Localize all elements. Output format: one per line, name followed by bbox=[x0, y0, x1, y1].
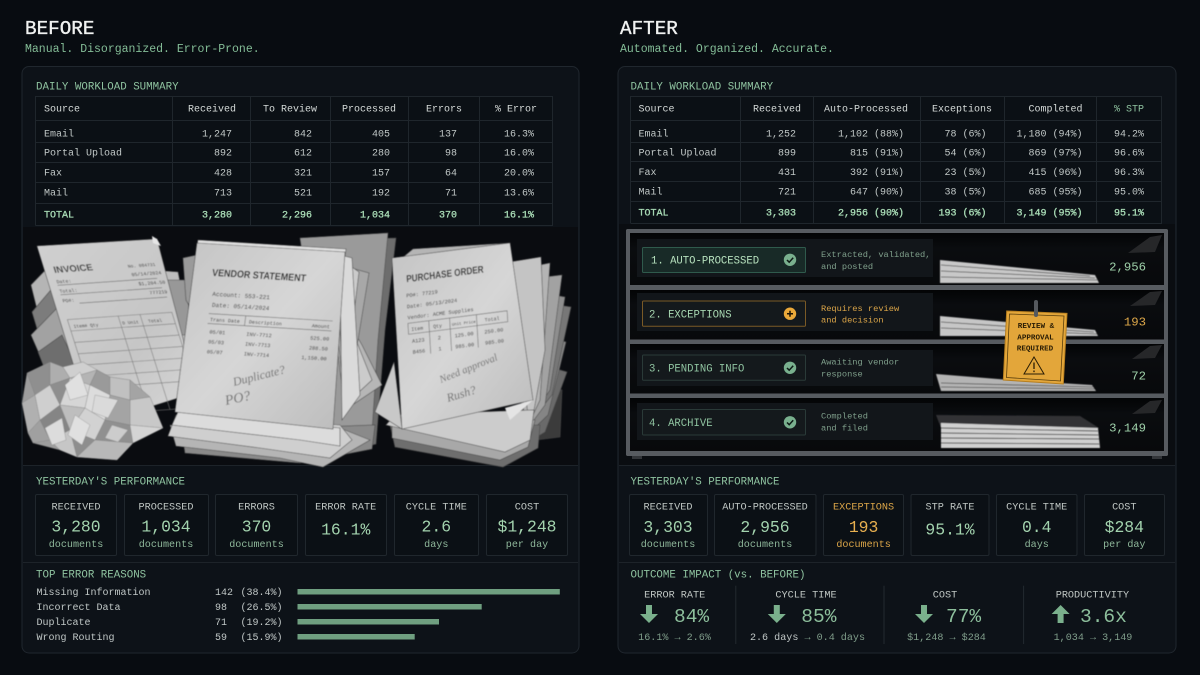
impact: cycle time: CYCLE TIME bbox=[775, 591, 837, 602]
shelf row 1: auto-processed: Extracted, validated, bbox=[821, 250, 930, 260]
kpi: cycle time bbox=[394, 494, 478, 556]
kpi: processed bbox=[124, 494, 208, 556]
kpi: processed: PROCESSED bbox=[138, 502, 194, 514]
bar chart: error reasons: (19.2%) bbox=[240, 617, 283, 629]
section label: outcome impact: OUTCOME IMPACT (vs. BEFORE) bbox=[630, 570, 805, 582]
kpi: received bbox=[630, 494, 708, 556]
purchase order stack: Unit Price bbox=[452, 320, 476, 328]
vendor statement stack: Amount bbox=[311, 323, 330, 330]
table: before workload: 192 bbox=[372, 188, 390, 200]
table: before workload: 428 bbox=[214, 168, 232, 180]
bar chart: error reasons: (26.5%) bbox=[240, 602, 283, 614]
table: after workload bbox=[630, 96, 1162, 224]
table: before workload: 16.0% bbox=[504, 148, 534, 160]
table: before workload: 612 bbox=[294, 148, 312, 160]
illustration: paper piles bbox=[22, 227, 578, 467]
kpi: error rate: ERROR RATE bbox=[315, 502, 376, 514]
before heading: BEFORE bbox=[25, 18, 94, 40]
invoice stack bbox=[31, 236, 205, 425]
impact: productivity: 1,034 → 3,149 bbox=[1054, 633, 1132, 644]
vendor statement stack: INV-7712 bbox=[246, 332, 272, 339]
table: after workload: 38 (5%) bbox=[944, 186, 986, 198]
bar chart: error reasons: 59 bbox=[215, 633, 227, 644]
table: after workload: Mail bbox=[638, 186, 663, 198]
impact: cost: $1,248 → $284 bbox=[907, 632, 986, 644]
table: after workload: Completed bbox=[1028, 104, 1083, 116]
stack: pending papers bbox=[936, 374, 1096, 391]
shelf row 3: pending info: 72 bbox=[1131, 370, 1146, 384]
shelf row 3: pending info: 3. PENDING INFO bbox=[649, 364, 744, 376]
stack: auto-processed papers bbox=[940, 260, 1099, 283]
vendor statement stack: Trans Date bbox=[210, 317, 240, 325]
table: after workload: 392 (91%) bbox=[850, 167, 904, 179]
table: after workload: 815 (91%) bbox=[850, 148, 904, 160]
table: after workload: 431 bbox=[778, 168, 796, 179]
table: after workload: 3,303 bbox=[766, 208, 796, 220]
table: after workload: Received bbox=[753, 104, 801, 116]
kpi: cost bbox=[1084, 494, 1164, 556]
table: before workload: 1,034 bbox=[360, 210, 390, 222]
table: before workload: 137 bbox=[439, 130, 457, 140]
illustration: sorted shelf bbox=[619, 224, 1175, 466]
table: before workload: 1,247 bbox=[202, 130, 232, 140]
purchase order stack: PO#: 77219 bbox=[406, 289, 438, 299]
shelf row 3: pending info bbox=[642, 355, 1146, 384]
kpi: received: 3,303 bbox=[643, 518, 693, 537]
table: after workload: Email bbox=[638, 128, 669, 140]
purchase order stack bbox=[375, 243, 571, 467]
vendor statement stack: INV-7714 bbox=[243, 352, 269, 359]
impact: cycle time bbox=[750, 591, 865, 644]
purchase order stack: Need approval bbox=[437, 352, 499, 386]
table: before workload: 842 bbox=[294, 130, 312, 140]
table: after workload: 96.6% bbox=[1114, 148, 1144, 160]
shelf row 2: exceptions: 193 bbox=[1124, 316, 1146, 330]
purchase order stack: 125.00 bbox=[455, 331, 474, 340]
kpi: errors: ERRORS bbox=[238, 502, 275, 514]
impact: productivity bbox=[1052, 591, 1132, 644]
table: after workload: TOTAL bbox=[638, 208, 669, 220]
crumpled paper ball bbox=[22, 362, 163, 460]
shelf row 3: pending info: Awaiting vendor bbox=[821, 358, 899, 368]
section label: after performance: YESTERDAY'S PERFORMANCE bbox=[630, 476, 780, 488]
table: before workload: 13.6% bbox=[504, 188, 534, 200]
kpi: exceptions bbox=[824, 494, 904, 556]
kpi: cycle time: CYCLE TIME bbox=[406, 502, 467, 514]
kpi: cost: $284 bbox=[1105, 518, 1144, 537]
impact: error rate: 16.1% → 2.6% bbox=[638, 633, 712, 644]
kpi: cost: per day bbox=[1103, 539, 1146, 551]
impact: error rate bbox=[638, 591, 712, 644]
impact: cost: 77% bbox=[946, 606, 981, 628]
table: after workload: 721 bbox=[778, 188, 796, 198]
purchase order stack: 250.00 bbox=[484, 327, 504, 336]
invoice stack: INVOICE bbox=[52, 263, 94, 276]
vendor statement stack: Account: 553-221 bbox=[212, 291, 271, 301]
table: before workload: Portal Upload bbox=[44, 148, 122, 160]
table: before workload: 370 bbox=[439, 210, 457, 222]
bar chart: error reasons: 71 bbox=[215, 618, 227, 629]
table: before workload: 16.1% bbox=[504, 210, 534, 222]
shelf row 2: exceptions: and decision bbox=[821, 316, 884, 326]
table: after workload: 193 (6%) bbox=[938, 208, 986, 220]
table: after workload: 95.0% bbox=[1114, 188, 1144, 198]
table: before workload: To Review bbox=[263, 104, 317, 116]
impact: error rate: ERROR RATE bbox=[644, 591, 705, 602]
kpi: stp rate bbox=[911, 494, 989, 556]
section label: before performance: YESTERDAY'S PERFORMANCE bbox=[36, 476, 185, 488]
table: before workload: Mail bbox=[44, 188, 68, 200]
vendor statement stack: 1,150.00 bbox=[301, 355, 327, 363]
bar chart: error reasons: Wrong Routing bbox=[36, 632, 115, 644]
table: before workload: 71 bbox=[445, 188, 457, 200]
invoice stack: $1,204.50 bbox=[138, 280, 166, 287]
kpi: exceptions: EXCEPTIONS bbox=[833, 502, 894, 514]
shelf row 2: exceptions: 2. EXCEPTIONS bbox=[649, 310, 732, 322]
kpi: auto-processed bbox=[714, 494, 816, 556]
vendor statement stack: VENDOR STATEMENT bbox=[211, 268, 307, 284]
invoice stack: Date: bbox=[56, 279, 72, 285]
kpi: received: RECEIVED bbox=[52, 502, 100, 514]
callout: review tag: APPROVAL bbox=[1017, 334, 1054, 342]
purchase order stack: PURCHASE ORDER bbox=[406, 264, 484, 285]
bar chart: error reasons: Duplicate bbox=[36, 617, 91, 629]
vendor statement stack: 05/03 bbox=[208, 339, 224, 346]
impact: productivity: PRODUCTIVITY bbox=[1056, 591, 1129, 602]
purchase order stack: Total bbox=[485, 316, 500, 324]
shelf row 4: archive: 3,149 bbox=[1109, 422, 1146, 436]
bar chart: error reasons: (38.4%) bbox=[240, 587, 283, 599]
table: before workload: 157 bbox=[372, 168, 390, 180]
callout: review tag bbox=[1003, 300, 1067, 384]
table: before workload: 3,280 bbox=[202, 210, 232, 222]
invoice stack: D Unit bbox=[122, 319, 140, 326]
before column bbox=[22, 18, 579, 653]
kpi: auto-processed: documents bbox=[738, 539, 792, 551]
table: after workload: 869 (97%) bbox=[1028, 148, 1082, 160]
kpi: cost: per day bbox=[506, 539, 548, 551]
section label: before workload: DAILY WORKLOAD SUMMARY bbox=[36, 82, 179, 94]
shelf row 4: archive: and filed bbox=[821, 423, 868, 433]
table: before workload: Email bbox=[44, 128, 74, 140]
purchase order stack: Rush? bbox=[444, 383, 478, 405]
kpi: cycle time: days bbox=[1025, 539, 1049, 551]
table: before workload: Fax bbox=[44, 168, 62, 180]
shelf row 4: archive bbox=[642, 410, 1146, 436]
invoice stack: Total: bbox=[59, 288, 78, 295]
table: before workload: TOTAL bbox=[44, 210, 74, 222]
kpi: cycle time: days bbox=[424, 539, 448, 551]
invoice stack: 777219 bbox=[149, 289, 168, 296]
kpi: processed: 1,034 bbox=[141, 518, 191, 536]
impact: productivity: 3.6x bbox=[1080, 606, 1127, 628]
panel: before bbox=[22, 66, 579, 653]
stack: archive papers bbox=[936, 415, 1100, 448]
shelf row 3: pending info: response bbox=[821, 369, 863, 379]
table: before workload: 20.0% bbox=[504, 168, 534, 180]
table: after workload: 3,149 (95%) bbox=[1016, 208, 1082, 220]
kpi: cycle time: CYCLE TIME bbox=[1006, 502, 1067, 514]
kpi: cost: $1,248 bbox=[497, 518, 557, 536]
kpi: cycle time: 2.6 bbox=[422, 518, 451, 536]
kpi: auto-processed: AUTO-PROCESSED bbox=[722, 502, 808, 514]
kpi: exceptions: documents bbox=[836, 539, 891, 551]
kpi: received: RECEIVED bbox=[644, 502, 692, 514]
section label: after workload: DAILY WORKLOAD SUMMARY bbox=[630, 82, 774, 94]
table: before workload: Errors bbox=[426, 104, 462, 116]
table: before workload bbox=[36, 96, 553, 226]
vendor statement stack: 05/01 bbox=[209, 330, 226, 336]
vendor statement stack: INV-7713 bbox=[245, 342, 271, 349]
kpi: received bbox=[36, 494, 116, 556]
table: after workload: 95.1% bbox=[1114, 208, 1144, 220]
table: after workload: 899 bbox=[778, 148, 796, 160]
purchase order stack: Item bbox=[411, 325, 423, 333]
invoice stack: No. 084731 bbox=[127, 262, 157, 270]
impact: cycle time: 2.6 days → 0.4 days bbox=[750, 632, 865, 644]
shelf row 4: archive: Completed bbox=[821, 412, 868, 422]
stack: exceptions papers bbox=[940, 316, 1098, 336]
table: before workload: 280 bbox=[372, 148, 390, 160]
shelf row 2: exceptions bbox=[642, 301, 1146, 330]
table: after workload: 2,956 (90%) bbox=[838, 208, 904, 220]
kpi: cycle time bbox=[996, 494, 1077, 556]
table: before workload: 2,296 bbox=[282, 210, 312, 222]
table: before workload: Processed bbox=[342, 104, 396, 116]
table: after workload: Auto-Processed bbox=[824, 104, 908, 116]
after column bbox=[618, 18, 1176, 653]
shelf row 1: auto-processed: 2,956 bbox=[1109, 260, 1146, 274]
kpi: auto-processed: 2,956 bbox=[740, 518, 790, 537]
kpi: errors: documents bbox=[229, 539, 284, 551]
vendor statement stack: Date: 05/14/2024 bbox=[212, 302, 270, 312]
kpi: errors bbox=[216, 494, 298, 556]
table: after workload: 94.2% bbox=[1114, 130, 1144, 140]
table: after workload: Source bbox=[638, 104, 675, 116]
kpi: received: 3,280 bbox=[51, 518, 101, 536]
purchase order stack: Qty bbox=[433, 323, 442, 330]
panel: after bbox=[618, 66, 1176, 653]
table: after workload: 647 (90%) bbox=[850, 186, 904, 198]
impact: cost bbox=[907, 591, 986, 644]
kpi: error rate bbox=[306, 494, 386, 556]
table: after workload: 78 (6%) bbox=[944, 128, 986, 140]
after heading: AFTER bbox=[620, 18, 678, 40]
table: after workload: 54 (6%) bbox=[944, 148, 986, 160]
bar chart: error reasons bbox=[36, 587, 560, 644]
kpi: exceptions: 193 bbox=[849, 518, 878, 537]
table: after workload: 96.3% bbox=[1114, 168, 1144, 179]
table: before workload: 521 bbox=[294, 188, 312, 200]
purchase order stack: 2 bbox=[438, 335, 441, 342]
bar chart: error reasons: 142 bbox=[215, 588, 233, 599]
table: before workload: 64 bbox=[445, 168, 457, 180]
vendor statement stack: 525.00 bbox=[310, 336, 330, 343]
shelf row 4: archive: 4. ARCHIVE bbox=[649, 418, 713, 430]
section label: top error reasons: TOP ERROR REASONS bbox=[36, 570, 146, 582]
shelf row 1: auto-processed bbox=[642, 248, 1146, 274]
table: after workload: Fax bbox=[638, 168, 657, 179]
table: after workload: 1,102 (88%) bbox=[838, 128, 904, 140]
table: before workload: 98 bbox=[445, 148, 457, 160]
table: before workload: 892 bbox=[214, 148, 232, 160]
kpi: cost bbox=[486, 494, 568, 556]
shelf row 2: exceptions: Requires review bbox=[821, 304, 900, 314]
kpi: error rate: 16.1% bbox=[321, 520, 370, 540]
vendor statement stack: Duplicate? bbox=[230, 362, 286, 389]
invoice stack: Total bbox=[147, 318, 163, 325]
invoice stack: PO#: bbox=[62, 298, 75, 304]
table: after workload: 23 (5%) bbox=[944, 167, 986, 179]
before subtitle: Manual. Disorganized. Error-Prone. bbox=[25, 43, 260, 56]
bar chart: error reasons: 98 bbox=[215, 603, 227, 614]
vendor statement stack: 288.50 bbox=[308, 346, 328, 353]
table: after workload: 685 (95%) bbox=[1028, 186, 1082, 198]
kpi: errors: 370 bbox=[242, 518, 271, 536]
purchase order stack: B456 bbox=[413, 348, 425, 356]
kpi: cost: COST bbox=[1112, 502, 1137, 514]
purchase order stack: 985.00 bbox=[455, 342, 474, 350]
vendor statement stack: PO? bbox=[223, 389, 252, 409]
purchase order stack: 1 bbox=[438, 346, 442, 353]
after subtitle: Automated. Organized. Accurate. bbox=[620, 43, 834, 56]
kpi: stp rate: STP RATE bbox=[926, 502, 974, 514]
kpi: cycle time: 0.4 bbox=[1022, 518, 1051, 537]
table: before workload: 321 bbox=[294, 168, 312, 180]
table: before workload: Received bbox=[188, 104, 236, 116]
kpi: processed: documents bbox=[139, 539, 193, 551]
kpi: stp rate: 95.1% bbox=[925, 520, 975, 540]
table: before workload: % Error bbox=[495, 104, 537, 116]
table: after workload: % STP bbox=[1114, 104, 1144, 116]
vendor statement stack: Description bbox=[249, 319, 282, 327]
callout: review tag: REQUIRED bbox=[1017, 346, 1054, 354]
invoice stack: Item# Qty bbox=[73, 322, 100, 330]
shelf row 1: auto-processed: and posted bbox=[821, 262, 873, 272]
invoice stack: 05/14/2024 bbox=[131, 270, 162, 278]
purchase order stack: Vendor: ACME Supplies bbox=[407, 307, 474, 321]
bar chart: error reasons: (15.9%) bbox=[240, 632, 283, 644]
vendor statement stack bbox=[168, 233, 396, 467]
shelf row 1: auto-processed: 1. AUTO-PROCESSED bbox=[651, 256, 759, 268]
purchase order stack: Date: 05/13/2024 bbox=[407, 298, 457, 310]
purchase order stack: 985.00 bbox=[485, 338, 504, 347]
table: after workload: 1,252 bbox=[766, 130, 796, 140]
impact: error rate: 84% bbox=[674, 606, 709, 628]
bar chart: error reasons: Incorrect Data bbox=[36, 603, 121, 614]
table: before workload: 16.3% bbox=[504, 130, 534, 140]
table: after workload: Exceptions bbox=[932, 104, 992, 116]
kpi: received: documents bbox=[641, 539, 695, 551]
table: before workload: 405 bbox=[372, 130, 390, 140]
table: before workload: Source bbox=[44, 104, 80, 116]
kpi: received: documents bbox=[49, 539, 103, 551]
bar chart: error reasons: Missing Information bbox=[36, 587, 151, 599]
kpi: cost: COST bbox=[515, 502, 539, 514]
table: after workload: Portal Upload bbox=[638, 148, 717, 160]
impact: cost: COST bbox=[933, 591, 957, 602]
table: after workload: 415 (96%) bbox=[1028, 167, 1082, 179]
impact: cycle time: 85% bbox=[801, 606, 837, 628]
vendor statement stack: 05/07 bbox=[206, 349, 223, 356]
table: after workload: 1,180 (94%) bbox=[1016, 128, 1082, 140]
purchase order stack: A123 bbox=[412, 337, 425, 345]
table: before workload: 713 bbox=[214, 188, 232, 200]
callout: review tag: REVIEW & bbox=[1018, 323, 1055, 331]
